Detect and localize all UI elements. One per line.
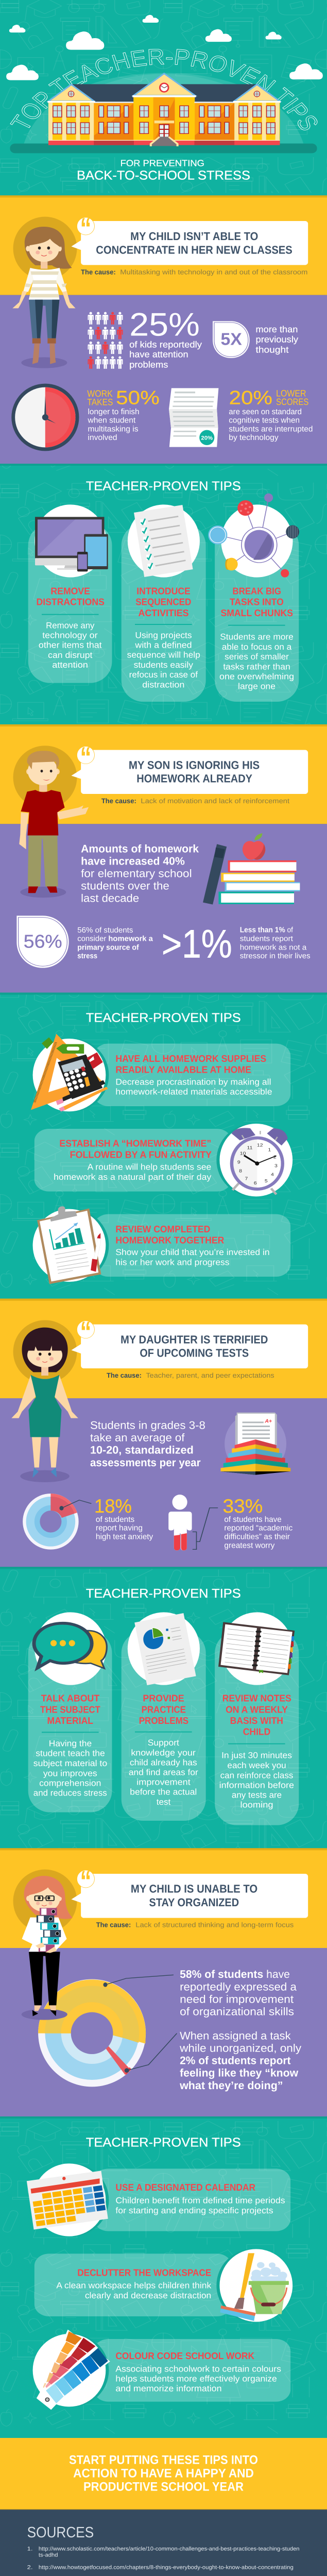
panel: homework stress stats <box>16 916 311 1112</box>
quote heading: HOMEWORK ALREADY <box>136 772 252 785</box>
card text <box>115 1247 270 1267</box>
card title: DISTRACTIONS <box>36 597 105 607</box>
card: homework supplies <box>31 1034 290 1112</box>
stat: 20 percent lower scores: by technology <box>229 433 279 442</box>
stat: homework increased 40 percent: have increased 40% <box>81 855 185 867</box>
card: practice problems <box>122 1612 206 1821</box>
panel: header <box>6 14 323 182</box>
card text: homework as a natural part of their day <box>54 1172 211 1182</box>
card text: each week you <box>227 1760 286 1770</box>
card text <box>219 1751 294 1809</box>
sources list: 1. <box>27 2546 32 2552</box>
icon: alarm clock: 6 <box>254 1180 257 1185</box>
card text: and find areas for <box>129 1768 198 1777</box>
card title <box>220 585 293 618</box>
heading: TEACHER-PROVEN TIPS <box>86 1586 241 1600</box>
panel: problem 4 organization <box>13 1865 308 2092</box>
stat: 33 percent: of students have <box>224 1515 282 1523</box>
icon: quote: “ <box>80 212 91 245</box>
card text <box>39 620 102 670</box>
closing call to action: PRODUCTIVE SCHOOL YEAR <box>83 2480 244 2494</box>
card title: FOLLOWED BY A FUN ACTIVITY <box>70 1149 212 1160</box>
stat: 56 percent badge <box>16 916 69 968</box>
icon: calendar <box>27 2171 108 2230</box>
stat: 20 percent lower scores: LOWER <box>276 388 306 398</box>
card: review notes <box>215 1612 299 1825</box>
card text: subject material to <box>33 1758 107 1768</box>
text: 56 percent explanation: 56% of students <box>77 926 133 934</box>
card text: with a defined <box>135 640 192 650</box>
card title: THE SUBJECT <box>40 1704 100 1715</box>
text: more than previously thought <box>255 325 298 354</box>
cause text: Lack of structured thinking and long-term focus <box>135 1921 294 1929</box>
card text <box>56 2281 212 2300</box>
icon: quote <box>77 1315 94 1348</box>
card text: comprehension <box>39 1778 101 1788</box>
text: 1 percent explanation <box>240 925 311 960</box>
card text: Using projects <box>135 630 192 640</box>
icon: alarm clock: 11 <box>247 1145 252 1150</box>
icon: alarm clock: 9 <box>237 1159 240 1164</box>
stat: work takes 50 percent: involved <box>88 433 117 442</box>
stat: 20 percent lower scores: SCORES <box>276 397 308 407</box>
card title: BREAK BIG <box>233 585 281 596</box>
stat: work takes 50 percent: WORK <box>87 388 113 399</box>
icon: person one third red <box>168 1495 218 1550</box>
quote heading <box>121 1333 268 1359</box>
card text: one overwhelming <box>219 671 294 681</box>
stat: 2 percent of students: what they’re doing” <box>180 2079 283 2092</box>
card text <box>127 630 200 689</box>
card text: information before <box>219 1780 294 1790</box>
quote heading: MY CHILD IS UNABLE TO <box>131 1883 257 1895</box>
title: TOP TEACHER-PROVEN TIPS <box>10 49 317 130</box>
text: more than previously thought: more than <box>255 325 298 334</box>
chart: organization donut <box>38 1975 177 2087</box>
heading: TEACHER-PROVEN TIPS <box>86 2135 241 2149</box>
card text: Students are more <box>220 632 294 641</box>
sources list <box>27 2546 300 2576</box>
card text: Associating schoolwork to certain colours <box>115 2364 281 2374</box>
card text: students easily <box>134 660 193 670</box>
character: woman with binders <box>13 1870 77 2020</box>
card: calendar <box>27 2163 290 2236</box>
stat: work takes 50 percent: longer to finish <box>88 407 140 416</box>
icon: alarm clock: 8 <box>239 1168 242 1174</box>
stat: 33 percent: 33% <box>223 1495 263 1517</box>
speech bubble <box>72 1865 308 1918</box>
quote heading <box>131 1883 257 1909</box>
panel: tips 1 <box>28 479 299 702</box>
card title <box>135 585 191 618</box>
clouds <box>6 15 323 80</box>
text: 56 percent explanation <box>77 926 153 960</box>
stat: homework increased 40 percent: for elementary school <box>81 867 192 879</box>
heading: TEACHER-PROVEN TIPS <box>86 479 241 493</box>
stat: 20 percent lower scores: are seen on standard <box>229 407 302 416</box>
character: girl <box>12 217 77 368</box>
card title: READILY AVAILABLE AT HOME <box>115 1064 251 1075</box>
card text: Remove any <box>46 620 94 630</box>
speech bubble <box>72 741 308 794</box>
card text: series of smaller <box>225 652 289 662</box>
card title: MATERIAL <box>47 1715 93 1726</box>
card text: for starting and ending specific projects <box>115 2206 273 2215</box>
card text <box>54 1162 211 1182</box>
card: declutter <box>35 2249 292 2322</box>
text: 56 percent explanation: consider homework a <box>77 935 153 943</box>
stat: 58 percent of students: of organizational skills <box>180 2005 294 2018</box>
card title: ON A WEEKLY <box>226 1704 288 1715</box>
card text <box>115 1077 272 1096</box>
card text: Show your child that you’re invested in <box>115 1247 270 1257</box>
card text: A routine will help students see <box>88 1162 211 1172</box>
stat: homework increased 40 percent <box>81 842 199 904</box>
card title: DECLUTTER THE WORKSPACE <box>77 2267 211 2278</box>
stat: standardized assessments: take an average of <box>90 1431 184 1444</box>
icon: network of nodes <box>208 494 299 578</box>
card text: helps students more effectively organize <box>115 2374 277 2383</box>
icon: alarm clock: 2 <box>273 1154 277 1159</box>
stat: 56 percent badge: 56% <box>24 931 62 952</box>
quote heading: STAY ORGANIZED <box>149 1896 239 1909</box>
stat: 2 percent of students <box>180 2029 301 2092</box>
card text: any tests are <box>232 1790 282 1800</box>
panel: tips 3 <box>28 1586 299 1825</box>
character: girl in green dress <box>11 1320 78 1482</box>
card text: can disrupt <box>48 650 92 660</box>
card text <box>115 2196 285 2215</box>
card title <box>139 1693 188 1726</box>
panel: problem 1 concentration <box>11 212 313 451</box>
icon: quote <box>77 1865 94 1897</box>
panel: problem 2 homework <box>13 741 308 905</box>
icon: test paper on book stack: A+ <box>265 1418 272 1424</box>
stat: 33 percent: reported “academic <box>224 1523 292 1532</box>
stat: work takes 50 percent: multitasking is <box>88 424 138 433</box>
icon: alarm clock: 1 <box>268 1147 271 1152</box>
card text: attention <box>52 660 88 670</box>
card title: SMALL CHUNKS <box>220 607 293 618</box>
stat: homework increased 40 percent: last decade <box>81 892 139 904</box>
card text: Children benefit from defined time periods <box>115 2196 285 2205</box>
stat: work takes 50 percent: TAKES <box>87 397 113 408</box>
stat: 58 percent of students: 58% of students have <box>180 1968 290 1980</box>
stat: standardized assessments: assessments per year <box>90 1456 201 1469</box>
icon: alarm clock: 12 <box>257 1142 263 1147</box>
icon: report document <box>134 1613 196 1685</box>
text: 56 percent explanation: stress <box>77 952 97 960</box>
card text: A clean workspace helps children think <box>56 2281 212 2290</box>
card text: Decrease procrastination by making all <box>115 1077 271 1087</box>
card text: and reduces stress <box>33 1788 107 1798</box>
card title: SEQUENCED <box>135 597 191 607</box>
text: 56 percent explanation: primary source of <box>77 943 139 952</box>
card text: child already has <box>130 1757 197 1767</box>
stat: 18 percent: high test anxiety <box>96 1532 153 1541</box>
subtitle <box>77 158 250 182</box>
character: boy <box>13 745 89 897</box>
icon: school supplies <box>31 1034 108 1112</box>
pictogram: 25 percent of kids <box>88 312 123 369</box>
card text: homework-related materials accessible <box>115 1087 272 1096</box>
stat: homework increased 40 percent: students over the <box>81 879 169 892</box>
closing call to action: START PUTTING THESE TIPS INTO <box>69 2453 258 2467</box>
speech bubble <box>72 1315 308 1368</box>
card: remove distractions <box>28 504 112 683</box>
speech bubble <box>72 212 308 265</box>
sources list: ts-adhd <box>39 2552 58 2558</box>
card title: REVIEW NOTES <box>222 1693 291 1704</box>
card text: before the actual <box>130 1787 197 1797</box>
stat: standardized assessments <box>90 1419 205 1469</box>
stat: 20 percent lower scores: cognitive tests when <box>229 416 300 425</box>
text: 1 percent explanation: homework as not a <box>240 943 306 952</box>
stat: 5X badge <box>213 321 250 358</box>
card: talk about material <box>28 1612 112 1812</box>
card title <box>40 1693 100 1726</box>
card text: and memorize information <box>115 2384 221 2393</box>
quote heading: MY SON IS IGNORING HIS <box>129 758 260 771</box>
stat: 20 percent lower scores: 20% <box>229 387 272 409</box>
card text: Having the <box>49 1738 92 1748</box>
stat: 58 percent of students: reportedly expressed a <box>180 1980 297 1993</box>
card title: ESTABLISH A “HOMEWORK TIME” <box>59 1138 211 1149</box>
stat: standardized assessments: 10-20, standardized <box>90 1444 194 1456</box>
card title: ACTIVITIES <box>138 607 189 618</box>
stat: 25 percent <box>129 307 202 369</box>
card text: can reinforce class <box>220 1770 293 1780</box>
icon: test paper with 20 percent <box>169 388 218 447</box>
sources list: 2. <box>27 2564 32 2570</box>
card title: INTRODUCE <box>136 585 191 596</box>
quote heading <box>129 758 260 785</box>
card text: distraction <box>142 680 184 689</box>
card title <box>115 1053 266 1075</box>
card title: TALK ABOUT <box>41 1693 99 1704</box>
stat: 18 percent: 18% <box>94 1495 132 1517</box>
closing call to action: ACTION TO HAVE A HAPPY AND <box>73 2466 254 2480</box>
card text <box>219 632 294 691</box>
card: homework time <box>35 1124 292 1196</box>
text: more than previously thought: thought <box>255 345 289 354</box>
card: sequenced activities <box>122 504 206 702</box>
text: 1 percent explanation: students report <box>240 935 293 943</box>
icon: quote: “ <box>80 1865 91 1897</box>
icon: spiral notebook <box>218 1622 295 1675</box>
stat: 33 percent <box>223 1495 292 1550</box>
icon: books and apple <box>203 833 300 905</box>
icon: quote <box>77 212 94 245</box>
quote heading: OF UPCOMING TESTS <box>140 1346 249 1359</box>
stat: 25 percent: problems <box>129 360 168 369</box>
icon: test paper on book stack <box>220 1413 290 1475</box>
stat: work takes 50 percent: 50% <box>116 387 160 409</box>
quote heading <box>96 230 292 256</box>
text: 1 percent explanation: stressor in their lives <box>240 952 311 960</box>
card title: HOMEWORK TOGETHER <box>115 1235 224 1246</box>
panel: sources <box>27 2523 300 2576</box>
stat: 18 percent: of students <box>96 1515 134 1523</box>
card text: improvement <box>136 1777 191 1787</box>
icon: quote: “ <box>80 1315 91 1348</box>
stat: less than 1 percent: >1% <box>162 922 232 966</box>
card text: you improves <box>43 1768 97 1778</box>
card text: tasks rather than <box>223 662 290 671</box>
card text: sequence will help <box>127 650 200 659</box>
ground <box>10 144 317 153</box>
card title: PROVIDE <box>143 1693 184 1704</box>
card text: refocus in case of <box>129 670 198 680</box>
card title: COLOUR CODE SCHOOL WORK <box>115 2350 254 2361</box>
card title: CHILD <box>243 1726 270 1737</box>
closing call to action <box>69 2453 258 2494</box>
stat: 58 percent of students: need for improvement <box>180 1993 294 2005</box>
card text: his or her work and progress <box>115 1257 229 1267</box>
cause text: The cause: <box>101 797 136 805</box>
cause text: The cause: <box>96 1921 131 1929</box>
stat: 58 percent of students <box>180 1968 297 2018</box>
icon: alarm clock <box>230 1128 288 1194</box>
icon: alarm clock: 4 <box>271 1172 274 1177</box>
card: small chunks <box>208 494 299 702</box>
card title: HAVE ALL HOMEWORK SUPPLIES <box>115 1053 266 1064</box>
card title: TASKS INTO <box>230 597 284 607</box>
text: 1 percent explanation: Less than 1% of <box>240 925 293 934</box>
icon: clipboard with chart <box>37 1206 101 1284</box>
card text: Support <box>148 1738 179 1748</box>
stat: 25 percent: 25% <box>129 307 200 343</box>
text: more than previously thought: previously <box>255 334 298 345</box>
card title: BASIS WITH <box>230 1715 283 1726</box>
card text: knowledge your <box>131 1748 196 1757</box>
sources heading: SOURCES <box>27 2523 94 2540</box>
cause text: Lack of motivation and lack of reinforcement <box>141 797 289 805</box>
icon: stopwatch half <box>11 384 79 451</box>
card text: technology or <box>42 630 98 640</box>
card text: able to focus on a <box>222 642 291 652</box>
stat: 33 percent: greatest worry <box>224 1540 274 1550</box>
cause text: The cause: <box>81 268 116 276</box>
cause text: Multitasking with technology in and out of the classroom <box>120 268 307 276</box>
card text: other items that <box>39 640 102 650</box>
card: colour code <box>33 2330 290 2410</box>
icon: quote: “ <box>80 741 91 774</box>
stat: 5X badge: 5X <box>220 329 242 349</box>
card text <box>129 1738 198 1807</box>
card text: clearly and decrease distraction <box>85 2291 211 2300</box>
card title <box>36 585 105 607</box>
subtitle: FOR PREVENTING <box>121 158 204 168</box>
stat: 25 percent: have attention <box>129 349 188 360</box>
stat: 18 percent <box>94 1495 153 1541</box>
stat: work takes 50 percent <box>87 387 160 442</box>
icon: alarm clock: 10 <box>240 1151 246 1156</box>
stat: 18 percent: report having <box>96 1523 143 1532</box>
icon: quote <box>77 741 94 774</box>
panel: tips 2 lower cards <box>33 1124 292 1284</box>
stat: 25 percent: of kids reportedly <box>129 340 202 349</box>
panel: tips 4 <box>27 2135 292 2322</box>
icon: alarm clock: 5 <box>265 1178 268 1183</box>
icon: binders <box>37 1908 61 1952</box>
stat: 20 percent lower scores <box>229 387 313 442</box>
card title <box>115 1224 224 1246</box>
card text: large one <box>238 682 276 691</box>
sources list: http://www.howtogetfocused.com/chapters/8-things-everybody-ought-to-know-about-concentrating <box>39 2564 294 2570</box>
card title <box>59 1138 212 1160</box>
icon: devices <box>35 517 108 571</box>
subtitle: BACK-TO-SCHOOL STRESS <box>77 168 250 182</box>
icon: school building <box>47 74 281 146</box>
stat: 2 percent of students: while unorganized, only <box>180 2042 301 2054</box>
stat: 2 percent of students: When assigned a task <box>180 2029 291 2042</box>
chart: donut 18 percent <box>23 1494 91 1550</box>
card text <box>115 2364 281 2393</box>
stat: homework increased 40 percent: Amounts of homework <box>81 842 199 855</box>
card text: In just 30 minutes <box>221 1751 292 1760</box>
quote heading: MY DAUGHTER IS TERRIFIED <box>121 1333 268 1346</box>
icon: test paper with 20 percent: 20% <box>201 435 213 441</box>
icon: speech bubbles <box>34 1623 107 1668</box>
card title: REVIEW COMPLETED <box>115 1224 210 1234</box>
stat: 2 percent of students: 2% of students report <box>180 2054 291 2066</box>
card title: USE A DESIGNATED CALENDAR <box>115 2182 255 2193</box>
stat: work takes 50 percent: when student <box>88 416 135 425</box>
cause text: Teacher, parent, and peer expectations <box>146 1371 274 1379</box>
stat: 33 percent: difficulties” as their <box>224 1532 290 1541</box>
icon: alarm clock: 3 <box>274 1163 278 1168</box>
card text: student teach the <box>36 1749 105 1758</box>
icon: alarm clock: 7 <box>245 1176 248 1181</box>
cause text <box>107 1371 274 1379</box>
quote heading: MY CHILD ISN’T ABLE TO <box>130 230 258 243</box>
card title: PRACTICE <box>142 1704 186 1715</box>
icon: checklist <box>134 505 193 577</box>
icon: colour fan <box>37 2330 110 2410</box>
card: review homework <box>33 1206 290 1284</box>
icon: mop and bucket <box>220 2253 289 2321</box>
stat: 2 percent of students: feeling like they “know <box>180 2066 298 2079</box>
panel: problem 3 tests <box>11 1315 308 1550</box>
cause text: The cause: <box>107 1371 142 1379</box>
card title <box>222 1693 291 1737</box>
card text: looming <box>240 1800 273 1809</box>
card title: REMOVE <box>50 585 90 596</box>
card title: PROBLEMS <box>139 1715 188 1726</box>
heading: TEACHER-PROVEN TIPS <box>86 1010 241 1025</box>
card text: test <box>157 1797 170 1807</box>
stat: standardized assessments: Students in grades 3-8 <box>90 1419 205 1431</box>
card text <box>33 1738 107 1798</box>
